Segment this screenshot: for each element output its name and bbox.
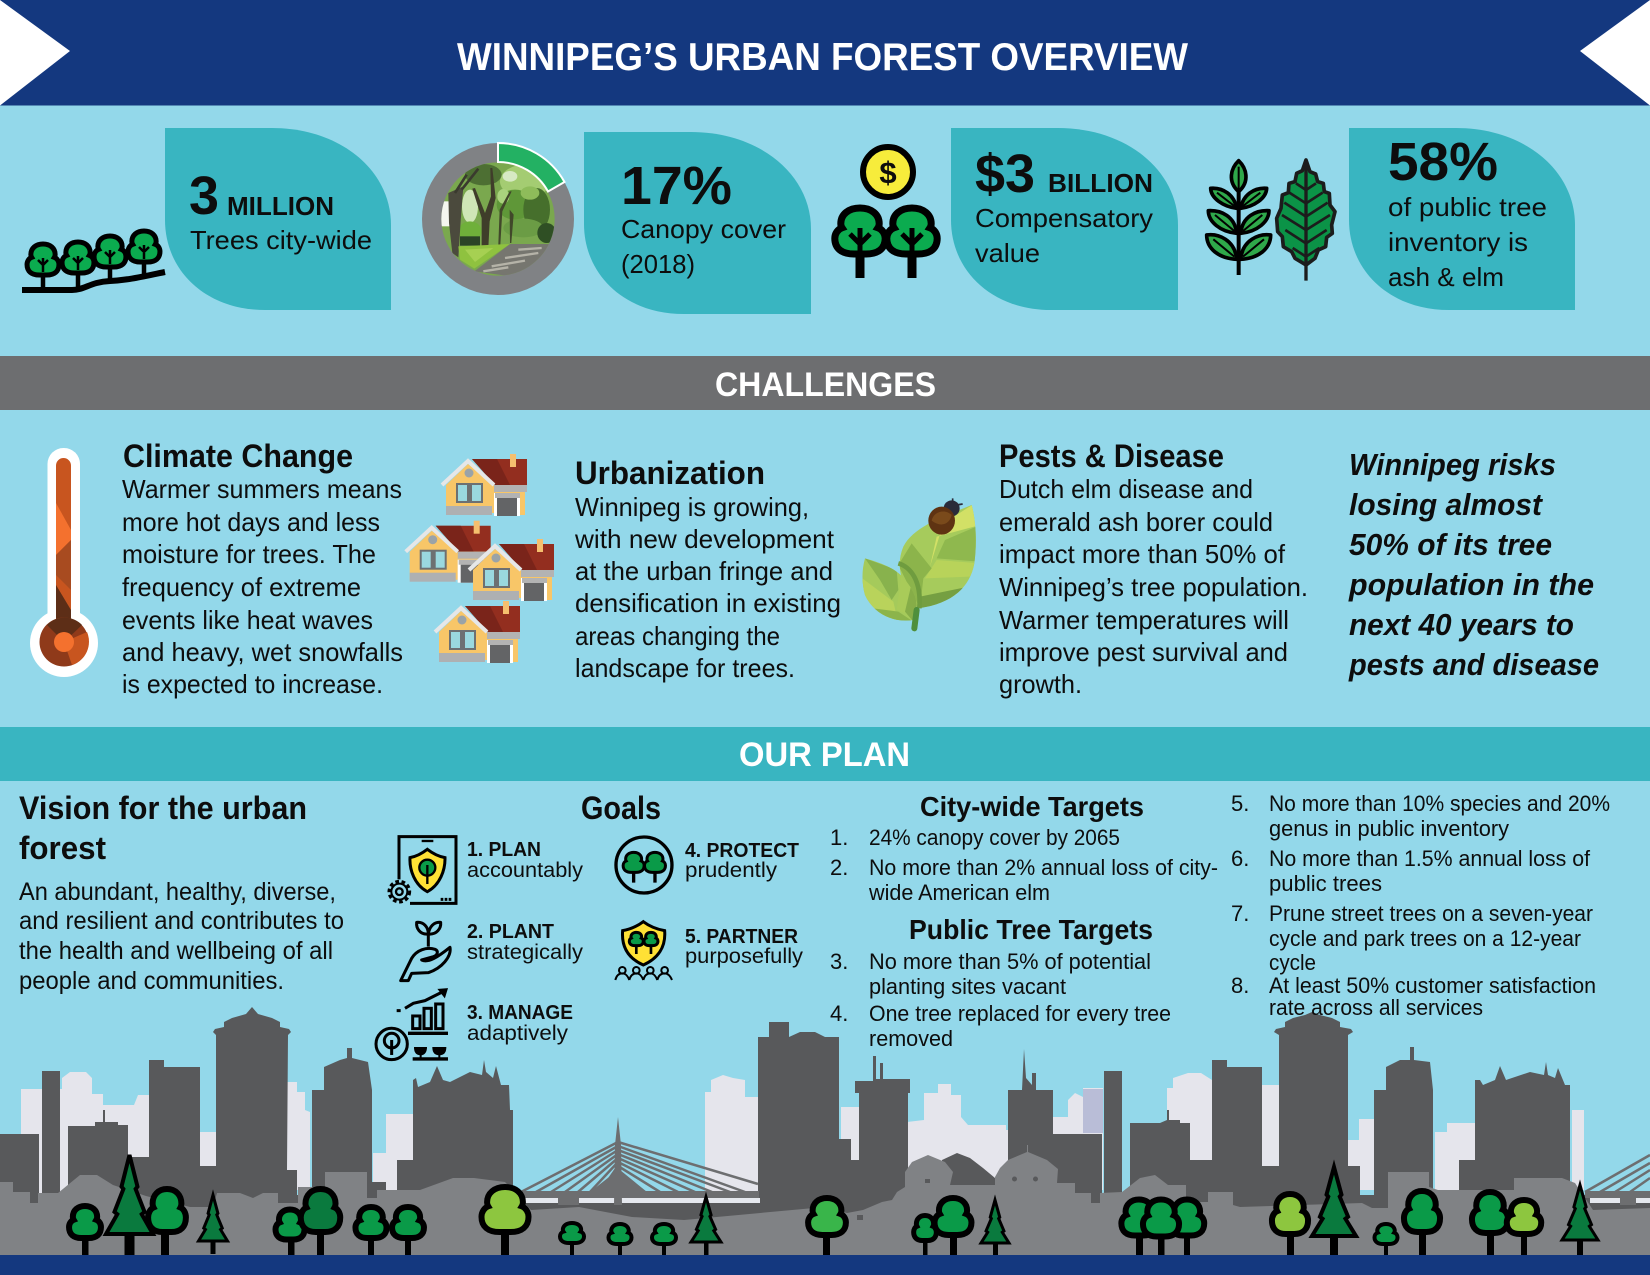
text: goal 2 [467,921,584,964]
text: pests and disease: impact more than 50% of [999,539,1286,569]
text: climate change [122,438,403,699]
callout: risk statement [1348,447,1599,682]
text: vision: An abundant, healthy, diverse, [19,878,336,906]
header banner [0,0,1650,106]
text: pests and disease [999,438,1308,699]
our plan band [0,727,1650,781]
callout: risk statement: population in the [1348,567,1594,602]
challenges band [0,356,1650,410]
panel: $3 billion compensatory value: $3 [975,144,1035,204]
text: public tree targets: Public Tree Targets [909,914,1153,945]
panel: 3 million trees [165,128,391,310]
text: climate change: moisture for trees. The [122,539,376,569]
panel: 17% canopy cover: (2018) [621,249,695,279]
text: targets 5 to 8: 7. [1231,901,1249,926]
text: public tree targets: planting sites vacant [869,974,1066,999]
text: urbanization: Urbanization [575,455,765,491]
tree group: left [69,1155,424,1256]
icon: dollar coin above two trees [835,147,937,278]
text: city-wide targets: City-wide Targets [920,791,1144,822]
text: targets 5 to 8: Prune street trees on a seven-year [1269,901,1593,926]
panel: 58% ash and elm: inventory is [1388,227,1528,257]
text: public tree targets: No more than 5% of potential [869,949,1151,974]
text: vision [19,790,344,995]
text: targets 5 to 8: genus in public inventory [1269,816,1509,841]
text: city-wide targets: wide American elm [868,880,1050,905]
icon: houses [406,454,554,663]
panel: $3 billion compensatory value: value [975,238,1040,268]
panel: 58% ash and elm: of public tree [1388,192,1547,222]
panel: 17% canopy cover: Canopy cover [621,214,786,244]
text: goal 4: 4. PROTECT [685,840,799,862]
text: goal 1: 1. PLAN [467,839,541,861]
text: goal 2: strategically [467,941,584,964]
goals heading: Goals [581,790,661,826]
text: public tree targets: 3. [830,949,848,974]
callout: risk statement: 50% of its tree [1349,527,1552,562]
dark buildings [0,1007,1650,1225]
text: climate change: Climate Change [123,438,353,474]
panel: 3 million trees: MILLION [227,191,334,221]
icon: elm leaf [1277,160,1335,281]
text: urbanization: areas changing the [575,621,780,651]
callout: risk statement: next 40 years to [1349,607,1574,642]
text: city-wide targets: 1. [830,825,848,850]
text: city-wide targets: No more than 2% annual loss of city- [869,855,1218,880]
text: targets 5 to 8: 5. [1231,791,1249,816]
text: targets 5 to 8: At least 50% customer satisfaction [1269,973,1596,998]
text: targets 5 to 8: public trees [1269,871,1382,896]
text: targets 5 to 8: cycle [1269,950,1316,975]
icon: goal 4 protect [616,837,672,893]
text: targets 5 to 8: No more than 10% species and 20% [1269,791,1610,816]
text: vision: and resilient and contributes to [19,907,344,935]
callout: risk statement: pests and disease [1348,647,1599,682]
icon: ash leaf [1207,161,1271,275]
text: urbanization: at the urban fringe and [575,556,833,586]
icon: leaf with beetle [860,498,980,628]
icon: ash and elm leaves [1207,160,1335,281]
text: targets 5 to 8: 6. [1231,846,1249,871]
text: targets 5 to 8: rate across all services [1269,995,1483,1020]
text: pests and disease: growth. [999,669,1082,699]
text: urbanization: landscape for trees. [575,653,795,683]
background pale buildings [21,1072,1584,1200]
text: vision: the health and wellbeing of all [19,937,333,965]
text: city-wide targets [830,791,1218,905]
text: goal 5: purposefully [685,945,804,968]
text: vision: people and communities. [19,967,284,995]
text: climate change: more hot days and less [122,507,380,537]
panel: 17% canopy cover: 17% [621,156,732,216]
text: goal 3 [467,1002,573,1045]
panel: $3 billion compensatory value: BILLION [1048,168,1153,198]
text: pests and disease: emerald ash borer could [999,507,1273,537]
icon: dollar coin above two trees: $ [879,155,897,190]
panel: 58% ash and elm [1349,128,1575,310]
title: WINNIPEG’S URBAN FOREST OVERVIEW [457,36,1188,79]
text: public tree targets: 4. [830,1001,848,1026]
text: goal 5: 5. PARTNER [685,926,799,948]
text: goal 5 [685,926,804,968]
footer bar [0,1255,1650,1275]
text: targets 5 to 8 [1231,791,1610,1020]
text: targets 5 to 8: 8. [1231,973,1249,998]
icon: goal 5 partner [615,922,672,980]
text: targets 5 to 8: No more than 1.5% annual loss of [1269,846,1591,871]
icon: goal 2 plant [401,922,450,981]
panel: 3 million trees: Trees city-wide [190,225,372,255]
icon: canopy donut with street photo [422,143,574,295]
text: urbanization: densification in existing [575,588,841,618]
panel: $3 billion compensatory value [951,128,1178,310]
text: vision: forest [19,830,106,866]
text: goal 3: adaptively [467,1022,569,1045]
icon: row of four trees on a hill [22,231,165,290]
photo of tree-lined street [438,161,556,278]
panel: 58% ash and elm: ash & elm [1388,262,1504,292]
tree group: right [1121,1167,1598,1256]
icon: goal 1 plan [389,837,456,903]
text: public tree targets: removed [869,1026,953,1051]
panel: 58% ash and elm: 58% [1388,132,1498,192]
text: public tree targets: One tree replaced for every tree [869,1001,1171,1026]
text: goal 1 [467,839,584,882]
panel: 3 million trees: 3 [189,166,219,226]
tree group: centre [481,1187,1009,1256]
callout: risk statement: losing almost [1349,487,1544,522]
panel: $3 billion compensatory value: Compensatory [975,203,1153,233]
text: vision: Vision for the urban [19,790,307,826]
text: pests and disease: Pests & Disease [999,438,1224,474]
trees along the ground [69,1155,1598,1256]
text: urbanization: with new development [574,524,835,554]
text: climate change: Warmer summers means [122,474,402,504]
text: climate change: events like heat waves [122,605,373,635]
text: urbanization: Winnipeg is growing, [575,492,809,522]
text: goal 3: 3. MANAGE [467,1002,573,1024]
text: pests and disease: Warmer temperatures will [999,605,1289,635]
text: city-wide targets: 24% canopy cover by 2065 [869,825,1120,850]
text: climate change: frequency of extreme [122,572,361,602]
text: goal 1: accountably [467,859,584,882]
text: pests and disease: improve pest survival and [999,637,1288,667]
text: goal 4 [685,840,799,882]
text: targets 5 to 8: cycle and park trees on a 12-year [1269,926,1581,951]
text: pests and disease: Winnipeg’s tree population. [999,572,1308,602]
text: pests and disease: Dutch elm disease and [999,474,1253,504]
foreground grey buildings [0,1145,1650,1256]
text: goal 4: prudently [685,859,778,882]
icon: goal 3 manage [376,989,448,1060]
text: city-wide targets: 2. [830,855,848,880]
text: goal 2: 2. PLANT [467,921,554,943]
bridge [521,1117,1650,1205]
challenges band: CHALLENGES [715,366,936,404]
panel: 17% canopy cover [584,132,811,314]
icon: thermometer [30,448,98,677]
text: climate change: is expected to increase. [122,669,383,699]
text: urbanization [574,455,841,683]
our plan band: OUR PLAN [739,736,910,774]
skyline illustration [0,1007,1650,1256]
text: climate change: and heavy, wet snowfalls [122,637,403,667]
text: public tree targets [830,914,1171,1051]
callout: risk statement: Winnipeg risks [1349,447,1556,482]
